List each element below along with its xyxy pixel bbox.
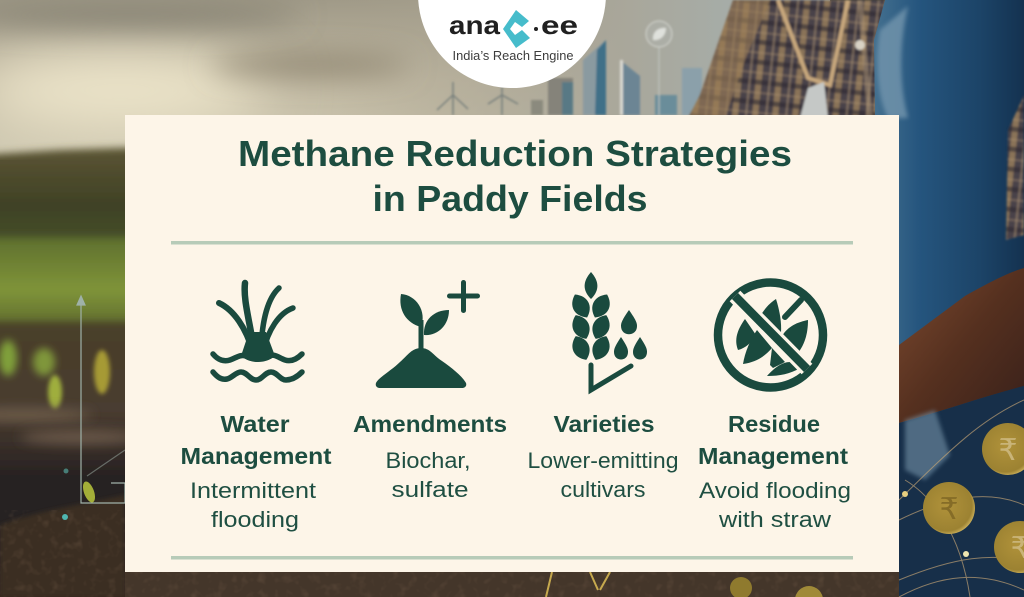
description: amendments: sulfate <box>392 477 468 502</box>
description: varieties <box>528 448 678 502</box>
icon: grass in water <box>213 283 302 380</box>
icon: grain and droplets <box>568 272 647 390</box>
background: gold rupee coins <box>546 423 1024 597</box>
description: residue management <box>699 478 851 532</box>
column: water management <box>180 283 332 532</box>
description: water management: Intermittent <box>190 478 316 503</box>
description: residue management: with straw <box>718 507 831 532</box>
title: Methane Reduction Strategies <box>238 133 792 174</box>
title: in Paddy Fields <box>372 178 648 219</box>
title <box>238 133 792 219</box>
logo wordmark: ee <box>541 10 578 40</box>
icon: sprout with plus <box>376 280 480 388</box>
heading: varieties: Varieties <box>554 411 654 437</box>
logo wordmark <box>449 10 578 48</box>
background: wind turbines and city skyline <box>437 21 702 115</box>
heading: water management: Water <box>220 411 290 437</box>
heading: residue management: Residue <box>728 411 820 437</box>
background: gold rupee coins: ₹ <box>998 433 1018 468</box>
main panel <box>125 115 899 572</box>
background: gold rupee coins: ₹ <box>939 492 959 527</box>
column: residue management <box>698 282 851 532</box>
description: varieties: cultivars <box>560 477 646 502</box>
background: farmer in plaid shirt and denim <box>688 0 1024 597</box>
heading: residue management <box>698 411 848 469</box>
logo wordmark: ana <box>449 10 501 40</box>
heading: amendments: Amendments <box>353 411 507 437</box>
description: amendments: Biochar, <box>386 448 470 473</box>
description: water management: flooding <box>211 507 299 532</box>
background: chart overlay arrow <box>62 296 125 520</box>
heading: water management: Management <box>180 443 332 469</box>
heading: residue management: Management <box>698 443 848 469</box>
logo tagline: India’s Reach Engine <box>452 49 574 63</box>
column: amendments <box>353 280 507 502</box>
description: residue management: Avoid flooding <box>699 478 851 503</box>
heading: water management <box>180 411 332 469</box>
description: varieties: Lower-emitting <box>528 448 678 473</box>
logo badge <box>418 0 606 88</box>
description: water management <box>190 478 316 532</box>
description: amendments <box>386 448 470 502</box>
column: varieties <box>528 272 678 502</box>
icon: crossed-out leaves <box>718 282 823 388</box>
